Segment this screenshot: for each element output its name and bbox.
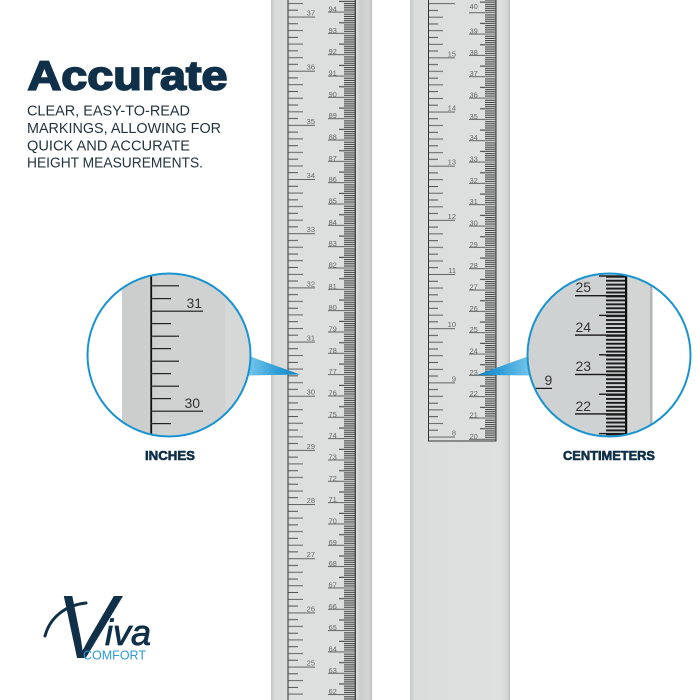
logo flourish bbox=[45, 603, 86, 636]
centimeter numbers: 68 bbox=[328, 559, 337, 568]
centimeter numbers: 77 bbox=[328, 367, 337, 376]
inch numbers bbox=[448, 49, 456, 438]
centimeter numbers: 30 bbox=[470, 218, 478, 228]
centimeter numbers: 65 bbox=[328, 623, 337, 632]
description text: QUICK AND ACCURATE bbox=[27, 139, 190, 155]
centimeter numbers: 37 bbox=[470, 69, 478, 78]
centimeter numbers: 84 bbox=[328, 218, 337, 227]
magnified number 9: 9 bbox=[544, 372, 552, 388]
inch numbers: 37 bbox=[307, 8, 315, 18]
centimeter numbers: 75 bbox=[328, 410, 337, 419]
centimeter numbers: 20 bbox=[470, 432, 478, 441]
inch tick marks bbox=[428, 0, 456, 445]
centimeter numbers: 62 bbox=[328, 687, 337, 696]
magnifier ring bbox=[528, 274, 690, 436]
inch numbers: 29 bbox=[307, 442, 315, 451]
inch numbers: 25 bbox=[307, 658, 315, 668]
centimeter numbers: 25 bbox=[470, 325, 478, 334]
centimeter numbers: 36 bbox=[470, 90, 478, 100]
centimeter numbers: 33 bbox=[470, 154, 478, 164]
centimeter numbers: 63 bbox=[328, 666, 337, 675]
magnifier background bbox=[88, 274, 250, 436]
centimeter numbers: 69 bbox=[328, 538, 337, 547]
description text: MARKINGS, ALLOWING FOR bbox=[27, 121, 221, 137]
inch numbers: 11 bbox=[448, 266, 456, 275]
inch numbers: 31 bbox=[307, 334, 315, 342]
centimeter numbers: 93 bbox=[328, 26, 337, 35]
inch numbers: 9 bbox=[452, 374, 456, 383]
centimeter numbers: 32 bbox=[470, 176, 478, 185]
inch numbers: 36 bbox=[307, 63, 315, 72]
centimeter numbers: 38 bbox=[470, 48, 478, 57]
centimeter numbers: 87 bbox=[328, 154, 337, 163]
ruler scale box bbox=[428, 0, 496, 441]
centimeter numbers: 94 bbox=[328, 4, 337, 14]
magnified ruler bbox=[526, 270, 652, 440]
centimeter numbers: 23 bbox=[470, 368, 478, 377]
centimeter numbers: 21 bbox=[470, 410, 478, 420]
ruler body bbox=[410, 0, 510, 700]
magnified number 22: 22 bbox=[576, 398, 591, 414]
magnified number 25: 25 bbox=[576, 279, 591, 295]
magnifier: inches bbox=[88, 270, 252, 440]
arrow: pointer from centimeters magnifier to ruler bbox=[477, 356, 529, 376]
centimeter numbers: 83 bbox=[328, 239, 337, 248]
inch numbers: 35 bbox=[307, 117, 315, 126]
centimeter tick marks bbox=[469, 0, 496, 445]
centimeter numbers: 82 bbox=[328, 260, 337, 270]
label: centimeters: CENTIMETERS bbox=[563, 448, 655, 463]
arrow: pointer from inches magnifier to ruler bbox=[249, 356, 300, 376]
centimeter numbers: 71 bbox=[328, 495, 337, 504]
inch numbers: 32 bbox=[307, 279, 315, 288]
centimeter numbers: 80 bbox=[328, 303, 337, 312]
centimeter numbers: 90 bbox=[328, 90, 337, 99]
centimeter numbers: 29 bbox=[470, 240, 478, 249]
inch numbers: 13 bbox=[448, 158, 456, 167]
label: inches: INCHES bbox=[145, 448, 195, 463]
centimeter numbers: 88 bbox=[328, 132, 337, 142]
centimeter numbers: 31 bbox=[470, 197, 478, 206]
centimeter numbers: 26 bbox=[470, 304, 478, 313]
inch numbers: 28 bbox=[307, 496, 315, 505]
magnified number 23: 23 bbox=[576, 358, 591, 374]
magnifier background bbox=[528, 274, 690, 436]
centimeter numbers: 35 bbox=[470, 112, 478, 121]
inch numbers: 30 bbox=[307, 388, 315, 397]
centimeter numbers: 22 bbox=[470, 389, 478, 398]
inch tick marks bbox=[288, 0, 316, 700]
magnified number 31: 31 bbox=[186, 295, 202, 311]
magnifier: centimeters bbox=[526, 270, 690, 440]
description text: HEIGHT MEASUREMENTS. bbox=[27, 155, 203, 171]
title: Accurate bbox=[28, 52, 227, 98]
centimeter numbers: 91 bbox=[328, 68, 337, 78]
magnified number 30: 30 bbox=[184, 395, 200, 411]
inch numbers: 14 bbox=[448, 104, 456, 112]
magnified number 24: 24 bbox=[576, 319, 591, 335]
magnified ruler bbox=[122, 270, 252, 440]
centimeter numbers: 70 bbox=[328, 516, 337, 526]
centimeter numbers: 86 bbox=[328, 175, 337, 184]
inch numbers: 33 bbox=[307, 225, 315, 234]
ruler body bbox=[271, 0, 372, 700]
inch numbers: 27 bbox=[307, 550, 315, 559]
logo: Viva Comfort bbox=[45, 578, 151, 678]
centimeter numbers: 64 bbox=[328, 644, 337, 654]
centimeter numbers: 92 bbox=[328, 47, 337, 56]
centimeter numbers: 89 bbox=[328, 111, 337, 120]
description text: CLEAR, EASY-TO-READ bbox=[27, 104, 190, 120]
centimeter numbers: 73 bbox=[328, 452, 337, 462]
centimeter numbers bbox=[328, 4, 337, 696]
magnifier ring bbox=[88, 274, 250, 436]
centimeter numbers: 81 bbox=[328, 282, 337, 291]
inch numbers: 15 bbox=[448, 49, 456, 58]
logo wordmark iva: iva bbox=[105, 612, 151, 653]
centimeter numbers: 72 bbox=[328, 474, 337, 483]
centimeter tick marks bbox=[328, 0, 355, 700]
description text bbox=[27, 104, 221, 171]
centimeter numbers: 78 bbox=[328, 346, 337, 355]
logo wordmark V: V bbox=[56, 578, 124, 678]
panel: inch and centimeter ruler, left bbox=[271, 0, 372, 700]
centimeter numbers: 39 bbox=[470, 26, 478, 36]
centimeter numbers bbox=[470, 2, 478, 441]
inch numbers: 8 bbox=[452, 428, 456, 438]
centimeter numbers: 85 bbox=[328, 196, 337, 206]
centimeter numbers: 67 bbox=[328, 580, 337, 590]
centimeter numbers: 27 bbox=[470, 282, 478, 292]
inch numbers: 34 bbox=[307, 171, 315, 180]
centimeter numbers: 34 bbox=[470, 133, 478, 142]
inch numbers bbox=[307, 8, 315, 668]
inch numbers: 26 bbox=[307, 604, 315, 613]
inch numbers: 12 bbox=[448, 212, 456, 221]
logo subtitle: COMFORT bbox=[83, 648, 146, 662]
inch numbers: 10 bbox=[448, 320, 456, 329]
centimeter numbers: 79 bbox=[328, 324, 337, 334]
panel: inch and centimeter ruler, right bbox=[410, 0, 510, 700]
ruler scale lines bbox=[288, 0, 356, 700]
centimeter numbers: 24 bbox=[470, 346, 478, 356]
centimeter numbers: 28 bbox=[470, 261, 478, 270]
centimeter numbers: 66 bbox=[328, 602, 337, 611]
centimeter numbers: 74 bbox=[328, 431, 337, 440]
centimeter numbers: 76 bbox=[328, 388, 337, 398]
centimeter numbers: 40 bbox=[470, 2, 478, 11]
